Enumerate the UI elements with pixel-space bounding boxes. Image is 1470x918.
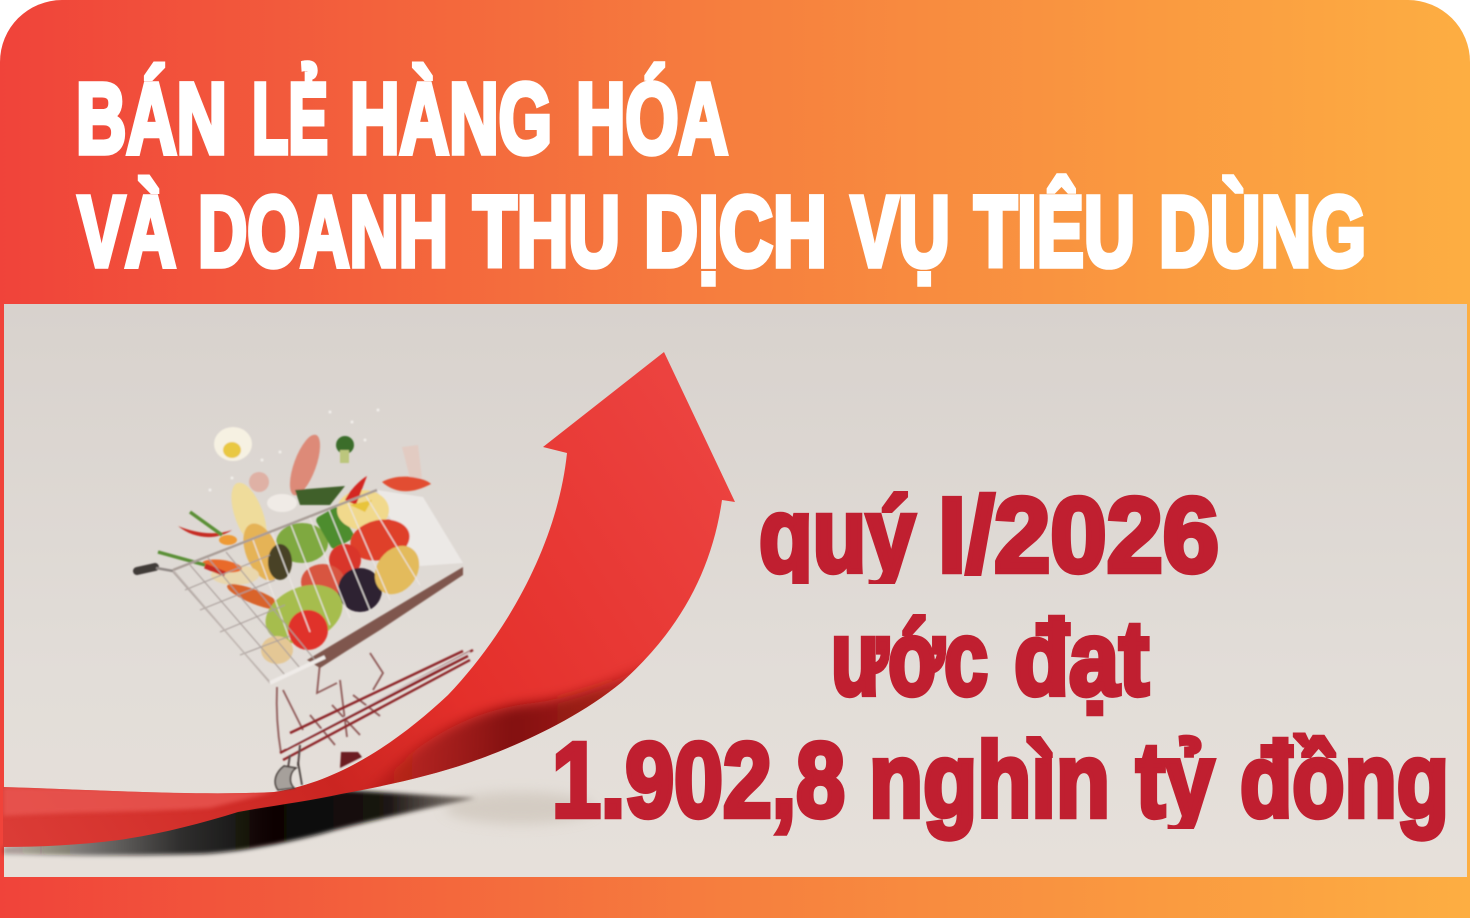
title: BÁN bbox=[76, 63, 227, 175]
line 3: 1.902,8 bbox=[552, 722, 845, 840]
line 3: tỷ bbox=[1136, 722, 1214, 840]
line 3 bbox=[552, 722, 1449, 840]
line 2 bbox=[831, 600, 1149, 718]
title: LẺ bbox=[252, 63, 328, 175]
line 1 bbox=[760, 491, 1218, 584]
line 2: đạt bbox=[1014, 600, 1149, 718]
title: VÀ bbox=[78, 176, 176, 288]
line 3: nghìn bbox=[869, 722, 1110, 840]
title: DỊCH bbox=[644, 176, 827, 288]
title: THU bbox=[473, 176, 620, 288]
ribbon shadow bbox=[3, 790, 476, 856]
title: DOANH bbox=[198, 176, 448, 288]
line 1: I/2026 bbox=[938, 476, 1219, 594]
title: HÓA bbox=[576, 63, 728, 175]
title: HÀNG bbox=[350, 63, 552, 175]
floating items bbox=[214, 427, 252, 461]
white carton bbox=[377, 490, 463, 566]
title bbox=[76, 63, 1366, 288]
shopping cart with groceries bbox=[137, 408, 473, 790]
title: DÙNG bbox=[1159, 176, 1366, 288]
cart legs and lower rack bbox=[277, 650, 473, 768]
line 2: ước bbox=[831, 600, 988, 718]
line 1: quý bbox=[759, 476, 915, 594]
headline figure bbox=[552, 476, 1449, 840]
groceries bbox=[224, 478, 274, 552]
red rising arrow bbox=[3, 352, 735, 847]
cart basket underside bbox=[307, 567, 463, 668]
photo panel bbox=[3, 304, 1467, 877]
basket wire grid bbox=[253, 496, 420, 640]
splash specks bbox=[208, 408, 380, 492]
title: TIÊU bbox=[974, 176, 1135, 288]
cart handle bbox=[137, 567, 155, 571]
title: VỤ bbox=[851, 176, 950, 288]
basket rim bbox=[173, 490, 377, 570]
wheels bbox=[275, 766, 296, 790]
